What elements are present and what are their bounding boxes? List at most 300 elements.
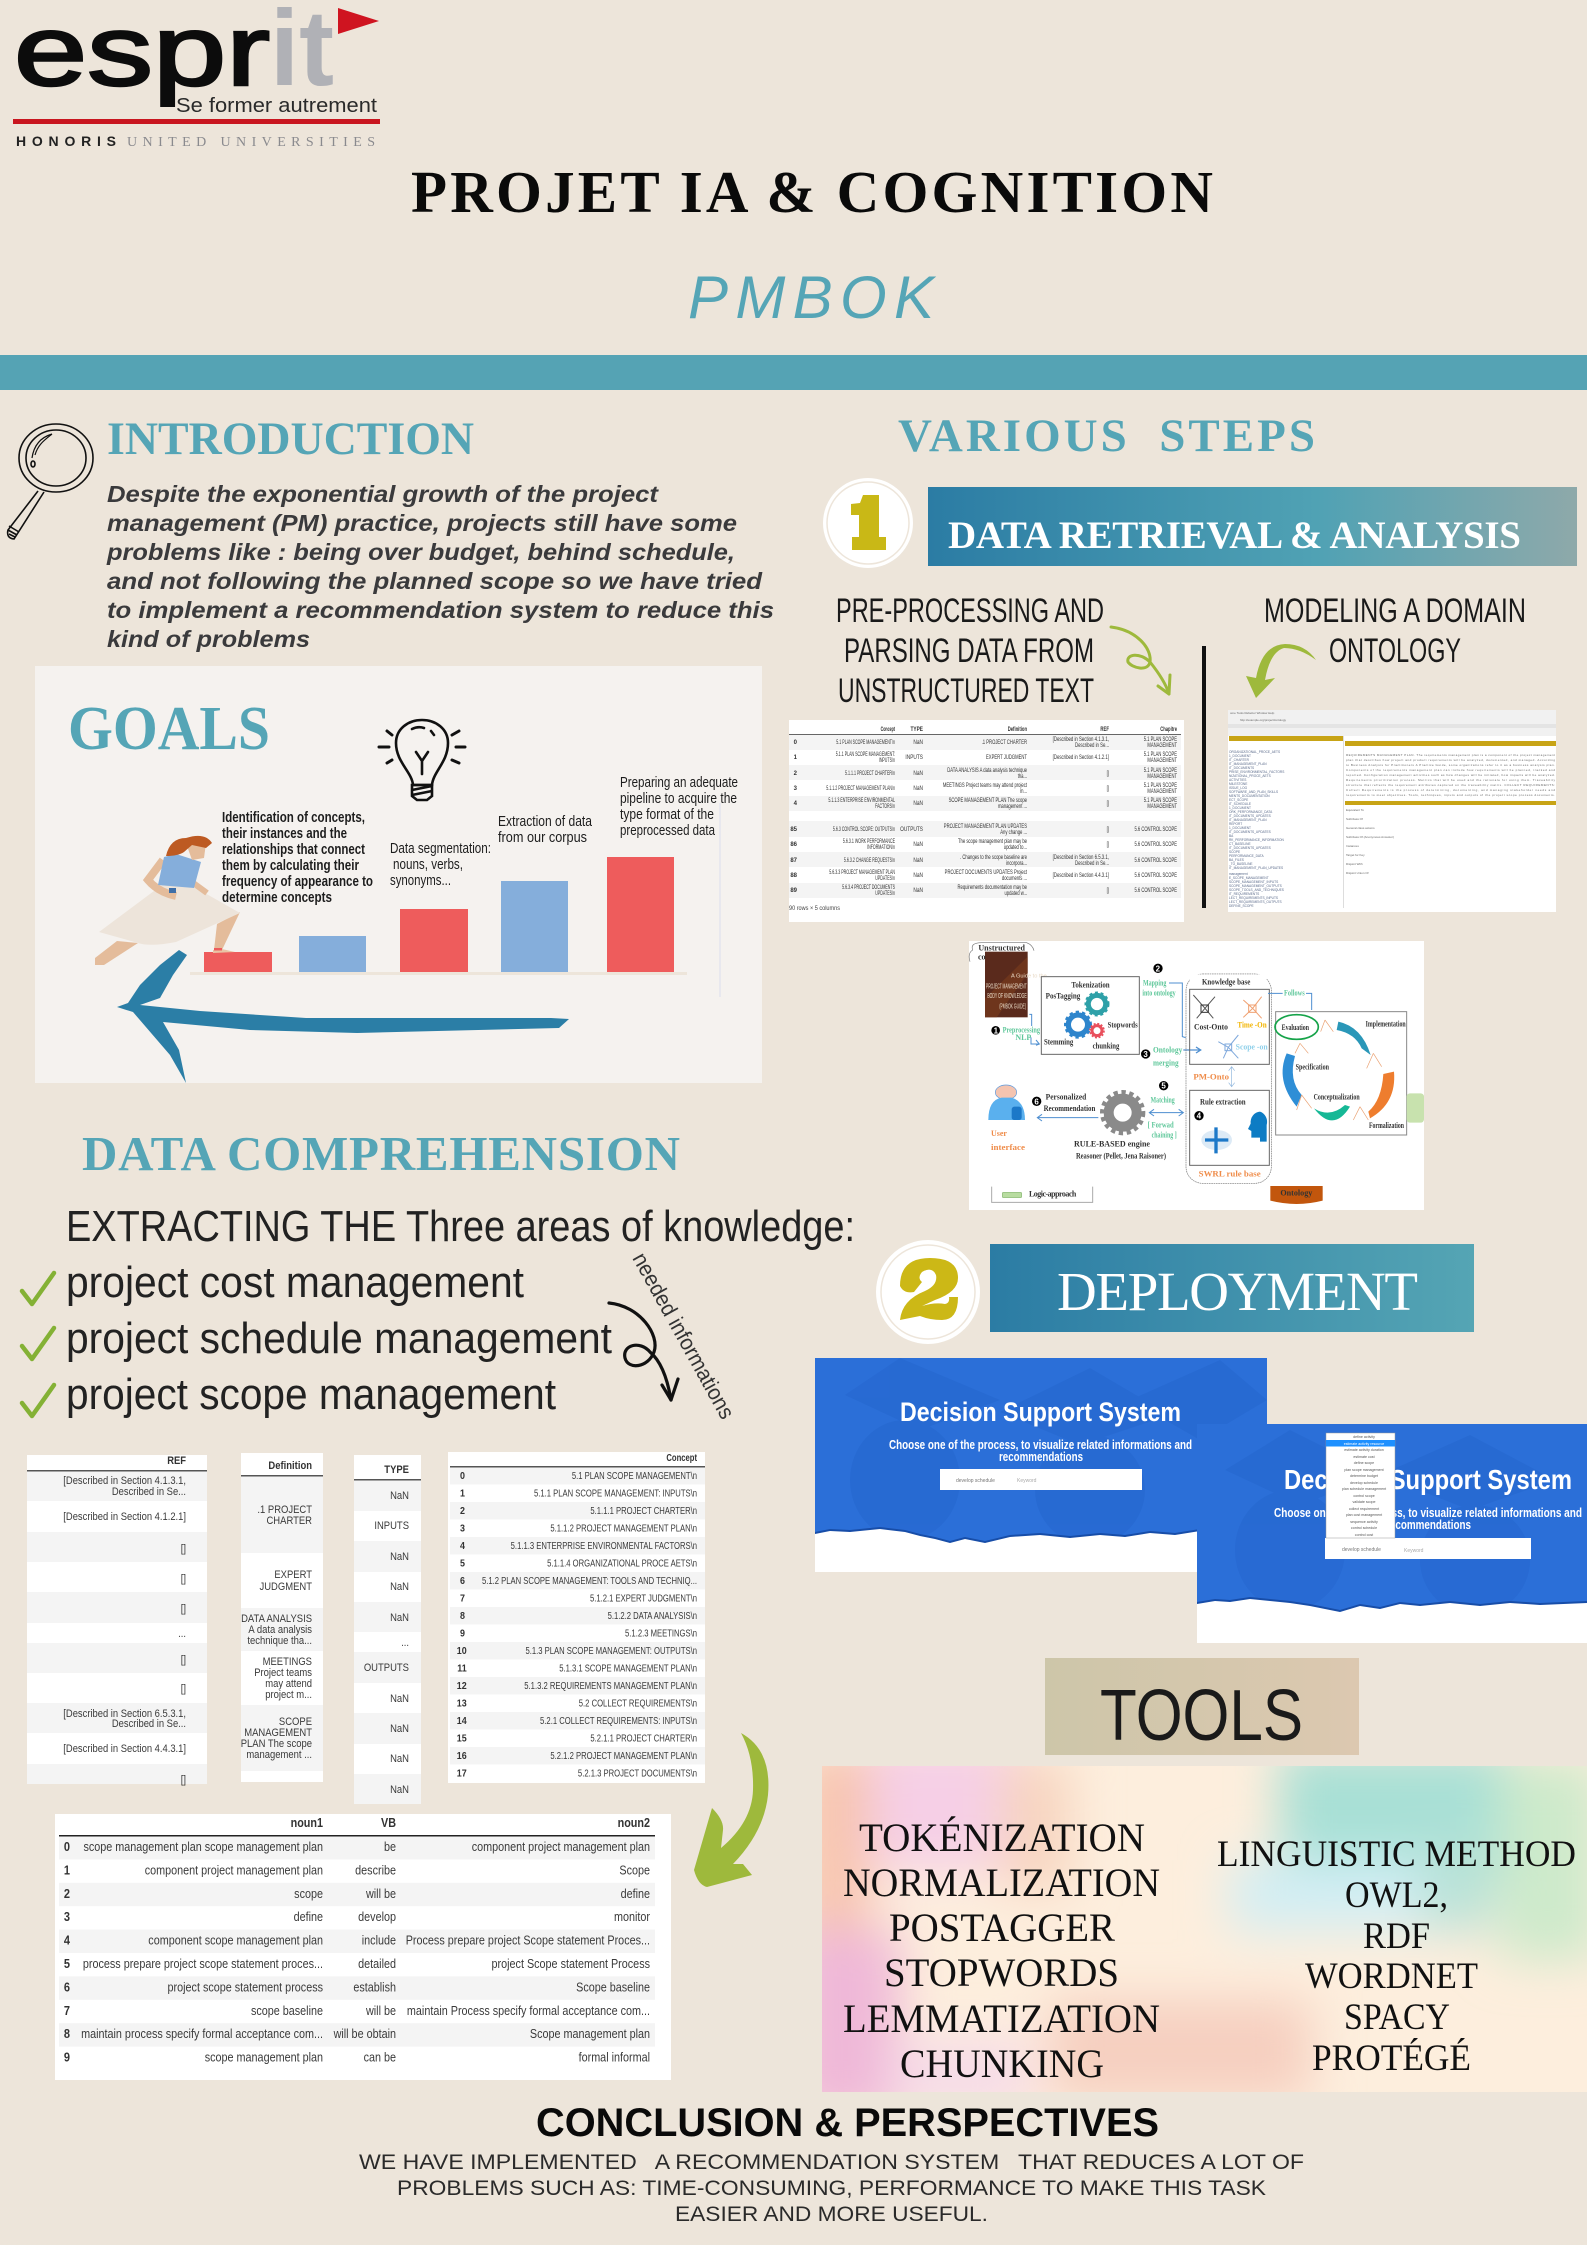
table: noun verb noun: 0 xyxy=(64,1840,70,1854)
legend: ontology: Ontology xyxy=(1280,1188,1312,1197)
ontology class list: ORK_PERFORMANCE_DATA xyxy=(1229,810,1273,814)
screenshot: decision support system 1: Choose one of the process, to visualize related informations and xyxy=(889,1438,1192,1452)
table: Definition column: MEETINGS xyxy=(263,1656,312,1668)
text block: introduction: Despite the exponential growth of the project xyxy=(107,481,659,507)
table: parsed data: INPUTS xyxy=(905,755,923,761)
table: Concept column: 5 xyxy=(460,1558,466,1570)
table: parsed data: [Described in Section 4.1.3.1, xyxy=(1053,736,1109,743)
box: nlp pipeline: Stemming xyxy=(1044,1037,1073,1046)
table: parsed data: 85 xyxy=(790,827,798,833)
table: parsed data: [] xyxy=(1107,800,1109,807)
table: Concept column: 5.1.1.2 PROJECT MANAGEMENT PLAN\n xyxy=(550,1522,697,1534)
step 6 recommendation: Recommendation xyxy=(1044,1104,1096,1113)
text: pre-processing: UNSTRUCTURED TEXT xyxy=(838,672,1094,710)
dropdown menu xyxy=(1326,1433,1395,1538)
text: preparing pipeline: Preparing an adequate xyxy=(620,775,738,791)
table: noun verb noun: 7 xyxy=(64,2004,70,2018)
step 5 matching xyxy=(1148,1081,1183,1140)
subtitle: PMBOK: PMBOK xyxy=(688,264,937,331)
ontology property rows: Disjoint Union Of xyxy=(1346,871,1369,875)
table: noun verb noun: Scope management plan xyxy=(530,2028,650,2041)
step 1 preprocessing xyxy=(991,1014,1040,1045)
table: Definition column: CHARTER xyxy=(266,1515,312,1527)
table: parsed data: FACTORS\n xyxy=(875,803,895,810)
banner: tools xyxy=(1045,1658,1359,1756)
table: Definition column: EXPERT xyxy=(274,1569,313,1581)
ontology class list: REPORT xyxy=(1229,822,1242,826)
dropdown menu: control scope xyxy=(1353,1494,1375,1498)
list: semantic tools: SPACY xyxy=(1344,1997,1450,2038)
box: nlp pipeline: PosTagging xyxy=(1046,992,1080,1001)
step 3 ontology merging: merging xyxy=(1153,1058,1179,1067)
table: Concept column: 5.2.1.1 PROJECT CHARTER\n xyxy=(590,1732,697,1744)
ontology annotation text: Components of the requirements management plan can include how requirements will be planned, tracked and xyxy=(1346,768,1555,772)
table: parsed data: 5.1.1.2 PROJECT MANAGEMENT PLAN\n xyxy=(826,785,895,792)
box: ontology lifecycle: Conceptualization xyxy=(1314,1093,1360,1102)
diagram: pipeline architecture xyxy=(969,941,1424,1210)
text block: conclusion: EASIER AND MORE USEFUL. xyxy=(675,2203,988,2226)
table: parsed data: management ... xyxy=(998,803,1027,810)
table: parsed data: 5.6.3.1 WORK PERFORMANCE xyxy=(843,838,896,845)
table: parsed data: 88 xyxy=(790,873,798,879)
follows connector: Follows xyxy=(1284,989,1305,998)
table: REF column: [Described in Section 6.5.3.1, xyxy=(63,1708,186,1720)
table: parsed data: NaN xyxy=(913,858,923,864)
ontology class list: SCOPE xyxy=(1229,850,1240,854)
logo: esprit xyxy=(13,0,380,150)
table: noun verb noun: define xyxy=(621,1887,650,1901)
table: Definition column: project m... xyxy=(265,1689,312,1701)
dropdown menu: collect requirement xyxy=(1349,1507,1379,1511)
ontology class list: IT_SCHEDULE xyxy=(1229,802,1251,806)
text: extracting areas of knowledge: EXTRACTING THE Three areas of knowledge: xyxy=(66,1202,855,1251)
table: noun verb noun: scope management plan xyxy=(205,2051,323,2065)
ontology class list: IT_CHARTER xyxy=(1229,758,1250,762)
dropdown menu: define activity xyxy=(1353,1435,1375,1439)
table: Definition column: SCOPE xyxy=(279,1716,312,1728)
step 6 recommendation: 6 xyxy=(1034,1097,1039,1106)
box: ontology lifecycle: Specification xyxy=(1296,1062,1329,1071)
table: parsed data: INPUTS\n xyxy=(879,757,895,764)
ontology property rows: General class axioms xyxy=(1346,826,1375,830)
table: parsed data: [Described in Section 6.5.3.1, xyxy=(1053,854,1109,861)
cloud: unstructured corpus: co xyxy=(978,952,986,961)
step 1 preprocessing: 1 xyxy=(994,1026,999,1035)
knowledge base container: Knowledge base xyxy=(1202,977,1251,986)
text: identification of concepts: their instances and the xyxy=(222,826,347,842)
table: parsed data: [] xyxy=(1107,785,1109,792)
ontology class list: NIZATIONAL_PROCE_AETS xyxy=(1229,774,1271,778)
ontology annotation text: reported. Configuration management activities such as how changes will be initiated, how impacts will be analyzed. xyxy=(1346,773,1555,777)
icon: pmbok book xyxy=(985,952,1047,1017)
badge: step 1 xyxy=(823,478,913,568)
screenshot: decision support system 2: Keyword xyxy=(1404,1548,1424,1554)
table: noun verb noun: 8 xyxy=(64,2028,70,2041)
table: parsed data: EXPERT JUDGMENT xyxy=(986,754,1028,761)
heading: goals: GOALS xyxy=(68,695,270,763)
table: noun verb noun: Process prepare project Scope statement Proces... xyxy=(406,1934,650,1948)
table: parsed data: MEETINGS Project teams may attend project xyxy=(943,782,1027,789)
table: noun verb noun: develop xyxy=(358,1911,396,1924)
text: needed informations: needed informations xyxy=(628,1248,740,1423)
table: parsed data: MANAGEMENT xyxy=(1147,788,1178,795)
text block: introduction: management (PM) practice, projects still have some xyxy=(107,510,737,536)
table: noun verb noun: process prepare project scope statement proces... xyxy=(83,1957,323,1971)
table: TYPE column: NaN xyxy=(390,1612,409,1624)
table: Concept column: 5.1.3.2 REQUIREMENTS MANAGEMENT PLAN\n xyxy=(524,1680,697,1691)
icon: magnifying glass xyxy=(8,424,93,539)
dropdown menu: validate scope xyxy=(1353,1500,1375,1504)
table: parsed data: .1 PROJECT CHARTER xyxy=(982,739,1027,746)
table: Concept column: 5.1.3.1 SCOPE MANAGEMENT PLAN\n xyxy=(559,1662,697,1674)
banner: data retrieval and analysis xyxy=(928,487,1577,566)
table: parsed data: INFORMATION\n xyxy=(867,844,895,851)
table: Concept column: 13 xyxy=(457,1698,467,1710)
ontology class list: RK_PERFORMANCE_INFORMATION xyxy=(1229,838,1285,842)
table: parsed data: MANAGEMENT xyxy=(1147,773,1178,780)
banner: tools: TOOLS xyxy=(1100,1676,1303,1756)
table: TYPE column: NaN xyxy=(390,1490,409,1502)
table: parsed data: MANAGEMENT xyxy=(1147,803,1178,810)
dropdown menu: control cost xyxy=(1355,1533,1373,1537)
table: parsed data: 5.1.1.1 PROJECT CHARTER\n xyxy=(845,770,895,777)
table: Concept column: 5.2.1.3 PROJECT DOCUMENTS\n xyxy=(578,1767,697,1779)
text: extraction of data: Extraction of data xyxy=(498,814,593,830)
ontology class list: IT_MANAGEMENT_PLAN xyxy=(1229,818,1267,822)
table: Definition column: Project teams xyxy=(254,1667,312,1679)
user interface: interface xyxy=(991,1143,1026,1152)
table: noun verb noun: will be xyxy=(365,2004,396,2018)
table: Definition column: DATA ANALYSIS xyxy=(241,1613,312,1625)
text: identification of concepts: them by calculating their xyxy=(222,858,359,874)
table: TYPE column: NaN xyxy=(390,1723,409,1735)
ontology class list: SCOPE_TOOLS_AND_TECHNIQUES xyxy=(1229,888,1284,892)
ontology class list: PRISE_ENVIRONMENTAL_FACTORS xyxy=(1229,770,1284,774)
text: preparing pipeline: pipeline to acquire the xyxy=(620,791,737,807)
table: noun verb noun: scope baseline xyxy=(251,2004,323,2018)
text: pre-processing xyxy=(836,592,1104,710)
table: parsed data: 5.1 PLAN SCOPE MANAGEMENT\n xyxy=(836,739,895,746)
table: noun verb noun: will be obtain xyxy=(333,2028,396,2041)
text block: introduction xyxy=(106,481,774,652)
table: noun verb noun: Scope xyxy=(619,1864,650,1878)
ontology class list: IT_REQUIREMENTS xyxy=(1229,892,1259,896)
ontology property rows: SubClass Of (Anonymous Ancestor) xyxy=(1346,835,1394,839)
table: TYPE column: NaN xyxy=(390,1753,409,1765)
screenshot: decision support system 1: Decision Support System xyxy=(900,1397,1181,1427)
table: noun verb noun xyxy=(55,1814,671,2080)
table: parsed data: 5.1 PLAN SCOPE xyxy=(1144,797,1177,804)
ontology property rows: Instances xyxy=(1346,844,1359,848)
table: Definition column: A data analysis xyxy=(248,1624,312,1636)
table: REF column: [Described in Section 4.1.2.1] xyxy=(63,1511,186,1523)
table: parsed data: Described in Se... xyxy=(1075,742,1109,749)
table: parsed data: NaN xyxy=(913,842,923,848)
table: parsed data: [] xyxy=(1107,826,1109,833)
table: parsed data: UPDATES\n xyxy=(875,890,895,897)
table: REF column: Described in Se... xyxy=(112,1718,186,1730)
table: Concept column: 6 xyxy=(460,1575,466,1587)
screenshot: decision support system 1: Keyword xyxy=(1017,1478,1037,1484)
ontology class list: IT_MANAGEMENT_PLAN_UPDATES xyxy=(1229,866,1283,870)
step 3 ontology merging: 3 xyxy=(1143,1050,1148,1059)
table: parsed data: [Described in Section 4.1.2.1] xyxy=(1053,754,1109,761)
table: Concept column: 5.1.3 PLAN SCOPE MANAGEMENT: OUTPUTS\n xyxy=(525,1645,697,1656)
rule-based engine xyxy=(1074,1092,1166,1161)
table: parsed data: incorpora... xyxy=(1006,860,1027,867)
table: parsed data: 5.6 CONTROL SCOPE xyxy=(1134,841,1177,848)
table: noun verb noun: 6 xyxy=(64,1981,70,1995)
table: Concept column: 5.1.2.3 MEETINGS\n xyxy=(625,1627,697,1639)
dropdown menu: sequence activity xyxy=(1350,1520,1378,1524)
arrow: green swirl xyxy=(1111,627,1170,694)
list: semantic tools xyxy=(1217,1834,1576,2079)
table: Concept column: 5.1.1.4 ORGANIZATIONAL PROCE AETS\n xyxy=(547,1557,697,1569)
table: noun verb noun: detailed xyxy=(358,1957,396,1971)
step 5 matching: 5 xyxy=(1161,1082,1166,1091)
table: parsed data: NaN xyxy=(913,771,923,777)
table: parsed data: 3 xyxy=(794,786,798,792)
table: parsed data: The scope management plan may be xyxy=(958,838,1027,845)
text block: introduction: kind of problems xyxy=(107,626,310,652)
table: noun verb noun: VB xyxy=(381,1816,396,1830)
step 1 preprocessing: NLP xyxy=(1015,1033,1031,1042)
table: noun verb noun: 2 xyxy=(64,1887,70,1901)
badge: step 2 xyxy=(876,1240,980,1344)
ontology class list: PERFORMANCE_DATA xyxy=(1229,854,1264,858)
ontology class list: 1_DOCUMENT xyxy=(1229,826,1251,830)
text: identification of concepts xyxy=(222,810,373,906)
text: extraction of data xyxy=(498,814,593,846)
ontology annotation text: to Business Analysis for Practitioners A Practice Guide, some organizations refer to it as a business analysis plan. xyxy=(1346,763,1555,767)
dropdown menu: plan scope management xyxy=(1344,1468,1384,1472)
table: parsed data: [Described in Section 4.4.3.1] xyxy=(1053,872,1109,879)
panel: goals xyxy=(35,666,762,1083)
table: TYPE column: NaN xyxy=(390,1784,409,1796)
table: Concept column: 9 xyxy=(460,1628,466,1640)
ontology class list xyxy=(1228,750,1285,908)
table: Concept column: Concept xyxy=(666,1452,697,1463)
ontology class list: _TO_BASELINE xyxy=(1228,862,1253,866)
text: pre-processing: PARSING DATA FROM xyxy=(844,632,1094,670)
box: ontology lifecycle: Formalization xyxy=(1369,1121,1404,1130)
table: noun verb noun: noun2 xyxy=(618,1816,650,1830)
ontology class list: DEFINE_SCOPE xyxy=(1229,904,1254,908)
illustration: woman climbing xyxy=(95,836,240,965)
table: parsed data: 5.6 CONTROL SCOPE xyxy=(1134,872,1177,879)
ontology class list: BA_FILES xyxy=(1229,858,1244,862)
table: parsed data: 86 xyxy=(790,842,798,848)
knowledge base container: PM-Onto xyxy=(1193,1072,1229,1081)
text: preparing pipeline xyxy=(620,775,738,839)
table: parsed data: 90 rows × 5 columns xyxy=(789,906,840,912)
ontology property rows: Target for Key xyxy=(1346,853,1365,857)
table: Concept column: 5.2.1.2 PROJECT MANAGEMENT PLAN\n xyxy=(550,1750,697,1761)
legend: logic approach xyxy=(992,1187,1093,1202)
ontology class list: E_SCOPE_MANAGEMENT xyxy=(1229,876,1269,880)
ontology class list: MENTS_DOCUMENTATION xyxy=(1229,794,1270,798)
knowledge base container: SWRL rule base xyxy=(1199,1169,1261,1178)
icon: pmbok book: PROJECT MANAGEMENT xyxy=(986,981,1027,990)
table: REF column: [Described in Section 4.1.3.1, xyxy=(63,1475,186,1487)
divider: vertical bar xyxy=(1202,646,1206,908)
table: REF column: [] xyxy=(181,1543,186,1555)
heading: various steps: VARIOUS STEPS xyxy=(898,410,1315,462)
table: noun verb noun: noun1 xyxy=(291,1816,323,1830)
table: Concept column: 15 xyxy=(457,1733,467,1745)
table: noun verb noun: will be xyxy=(365,1887,396,1901)
step 3 ontology merging: Ontology xyxy=(1153,1046,1182,1055)
ontology property rows xyxy=(1346,808,1394,875)
text: identification of concepts: relationships that connect xyxy=(222,842,365,858)
table: REF column: Described in Se... xyxy=(112,1486,186,1498)
table: parsed data: NaN xyxy=(913,873,923,879)
table: REF column: [] xyxy=(181,1774,186,1786)
dropdown menu: estimate cost xyxy=(1353,1455,1375,1459)
rule-based engine: RULE-BASED engine xyxy=(1074,1140,1150,1149)
table: Definition column: MANAGEMENT xyxy=(244,1727,313,1739)
table: Definition column: may attend xyxy=(265,1678,312,1690)
icon: light bulb xyxy=(379,720,465,800)
box: nlp pipeline: Stopwords xyxy=(1108,1021,1138,1030)
cloud: unstructured corpus xyxy=(969,943,1034,962)
table: REF column: [] xyxy=(181,1603,186,1615)
list: semantic tools: RDF xyxy=(1363,1916,1430,1957)
screenshot: ontology editor xyxy=(1228,710,1556,912)
rule-based engine: Reasoner (Pellet, Jena Raisoner) xyxy=(1076,1152,1166,1161)
step 5 matching: Matching xyxy=(1151,1096,1175,1105)
ontology property rows: Disjoint With xyxy=(1346,862,1363,866)
ontology class list: ISSUE_LOG xyxy=(1229,786,1248,790)
box: ontology lifecycle xyxy=(1275,1012,1424,1135)
box: ontology lifecycle: Implementation xyxy=(1366,1020,1406,1029)
table: parsed data: 2 xyxy=(794,771,798,777)
text: data segmentation: nouns, verbs, xyxy=(393,857,463,873)
table: parsed data: DATA ANALYSIS A data analysis technique xyxy=(947,767,1027,774)
table: REF column: [] xyxy=(181,1573,186,1585)
table: parsed data: MANAGEMENT xyxy=(1147,757,1178,764)
table: Concept column: 16 xyxy=(457,1750,467,1762)
icon: pmbok book: BODY OF KNOWLEDGE xyxy=(987,991,1027,1000)
table: Definition column: technique tha... xyxy=(247,1635,312,1647)
table: parsed data: 5.6.3 CONTROL SCOPE: OUTPUTS\n xyxy=(833,826,895,833)
banner: deployment: DEPLOYMENT xyxy=(1057,1261,1418,1322)
ontology annotation text: REQUIREMENTS MANAGEMENT PLAN. The requirements management plan is a component of the project management xyxy=(1346,753,1555,757)
logo: esprit: UNITED UNIVERSITIES xyxy=(127,135,375,150)
table: Concept column: 11 xyxy=(457,1663,467,1675)
arrow: swirl to needed informations xyxy=(609,1303,678,1400)
table: Concept column: 2 xyxy=(460,1505,466,1517)
ontology class list: SOFTWARE_AND_PLAN_SKILLS xyxy=(1229,790,1278,794)
table: parsed data: NaN xyxy=(913,786,923,792)
table: REF column: [Described in Section 4.4.3.1] xyxy=(63,1743,186,1755)
table: Concept column: 7 xyxy=(460,1593,465,1605)
logo: esprit: Se former autrement xyxy=(176,95,377,117)
table: parsed data: 0 xyxy=(794,740,798,746)
ontology annotation text: structure that reflects the requirement attributes captured on the traceability matrix. COLLECT REQUIREMENTS: xyxy=(1346,783,1555,787)
screenshot: decision support system 2: develop schedule xyxy=(1342,1547,1381,1553)
screenshot: decision support system 2 xyxy=(1197,1424,1587,1643)
table: parsed data: PROJECT MANAGEMENT PLAN UPDATES xyxy=(944,823,1027,830)
text: identification of concepts: determine concepts xyxy=(222,890,332,906)
table: parsed data: 5.6 CONTROL SCOPE xyxy=(1134,857,1177,864)
table: Concept column: 4 xyxy=(460,1540,466,1552)
banner: deployment xyxy=(990,1244,1474,1332)
screenshot: decision support system 2: recommendations xyxy=(1386,1518,1471,1532)
list: nlp techniques: NORMALIZATION xyxy=(843,1860,1160,1905)
step 3 ontology merging xyxy=(1141,1046,1201,1067)
table: parsed data: documents ... xyxy=(1002,875,1027,882)
table: parsed data: UPDATES\n xyxy=(875,875,895,882)
table: parsed data: 5.6.3.2 CHANGE REQUESTS\n xyxy=(844,857,895,864)
icon: pmbok book: A Guide to the xyxy=(1011,974,1047,980)
ontology class list: ECT_SCOPE xyxy=(1229,798,1248,802)
table: noun verb noun: 3 xyxy=(64,1911,70,1924)
list: nlp techniques xyxy=(843,1815,1160,2086)
ontology class list: IT_DOCUMENTS_UPDATES xyxy=(1229,830,1271,834)
dropdown menu: plan cost management xyxy=(1346,1513,1382,1517)
table: Concept column: 5.1.1.3 ENTERPRISE ENVIRONMENTAL FACTORS\n xyxy=(511,1540,697,1551)
table: parsed data: 1 xyxy=(794,755,798,761)
text block: introduction: and not following the planned scope so we have tried xyxy=(107,568,763,594)
table: parsed data: Requirements documentation may be xyxy=(957,884,1027,891)
table: parsed data: SCOPE MANAGEMENT PLAN The scope xyxy=(949,797,1027,804)
text block: introduction: to implement a recommendation system to reduce this xyxy=(107,597,774,623)
ontology property rows: Equivalent To xyxy=(1346,808,1364,812)
knowledge base container: Rule extraction xyxy=(1200,1098,1246,1107)
table: noun verb noun: describe xyxy=(355,1864,396,1878)
text: data segmentation: synonyms... xyxy=(390,873,451,889)
ontology class list: CT_BASELINE xyxy=(1229,842,1251,846)
table: noun verb noun: scope management plan scope management plan xyxy=(83,1840,323,1854)
step 5 matching: [ Forwad xyxy=(1148,1120,1174,1129)
table: parsed data: REF xyxy=(1100,726,1109,733)
ontology annotation text: Requirements prioritization process. Metrics that will be used and the rationale for using them. Traceability xyxy=(1346,778,1556,782)
text: data segmentation: Data segmentation: xyxy=(390,841,491,857)
table: Concept column: 14 xyxy=(457,1715,467,1727)
table: noun verb noun: can be xyxy=(364,2051,396,2065)
box: nlp pipeline: chunking xyxy=(1093,1042,1119,1051)
knowledge base container xyxy=(1186,974,1271,1183)
icon: pmbok book: (PMBOK GUIDE) xyxy=(999,1001,1026,1010)
table: noun verb noun: 9 xyxy=(64,2051,70,2065)
step 2 mapping: Mapping xyxy=(1143,979,1166,988)
knowledge base container: 4 xyxy=(1197,1112,1202,1121)
table: TYPE column: ... xyxy=(401,1637,409,1649)
table: noun verb noun: 5 xyxy=(64,1957,70,1971)
heading: data comprehension: DATA COMPREHENSION xyxy=(82,1126,680,1181)
table: REF column: ... xyxy=(178,1628,186,1640)
table: Definition column xyxy=(241,1453,323,1782)
table: parsed data: NaN xyxy=(913,740,923,746)
table: parsed data: [] xyxy=(1107,887,1109,894)
table: Concept column: 5.2 COLLECT REQUIREMENTS\n xyxy=(579,1697,697,1709)
table: parsed data: TYPE xyxy=(910,727,923,733)
text: modeling a domain ontology: ONTOLOGY xyxy=(1329,632,1461,670)
text: identification of concepts: Identification of concepts, xyxy=(222,810,365,826)
ontology class list: SCOPE_MANAGEMENT_INPUTS xyxy=(1229,880,1278,884)
table: parsed data: Described in Se... xyxy=(1075,860,1109,867)
heading: conclusion and perspectives: CONCLUSION & PERSPECTIVES xyxy=(536,2101,1159,2145)
header band xyxy=(0,355,1587,390)
chart: stepped bars xyxy=(190,803,721,997)
table: noun verb noun: scope xyxy=(294,1887,323,1901)
ontology annotation text: requirements to meet objectives. Tools, techniques, inputs and outputs of the project scope process documents. xyxy=(1346,793,1555,797)
knowledge base container: Cost-Onto xyxy=(1194,1022,1228,1031)
table: noun verb noun: component project management plan xyxy=(472,1840,650,1854)
table: parsed data: 5.6 CONTROL SCOPE xyxy=(1134,887,1177,894)
list: semantic tools: OWL2, xyxy=(1345,1875,1448,1916)
